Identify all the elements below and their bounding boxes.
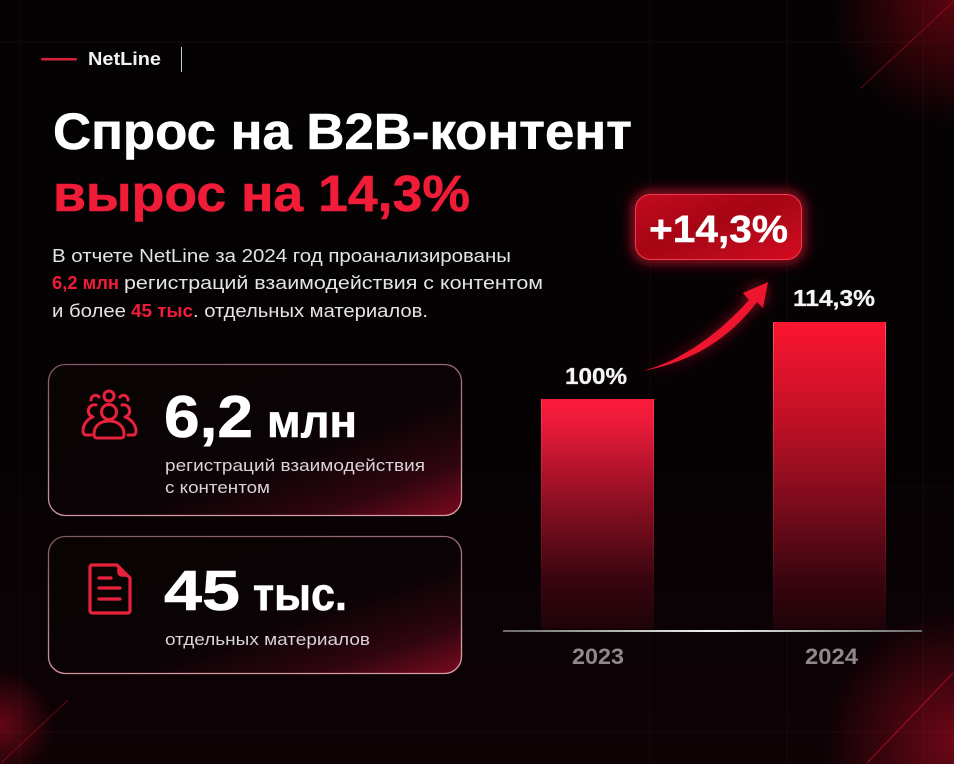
axis label: 2024: 2024 <box>805 644 859 669</box>
panel: 6,2 млн <box>48 364 462 516</box>
intro text block: В отчете NetLine за 2024 год проанализированы <box>52 246 511 266</box>
intro text block: . отдельных материалов. <box>193 301 428 321</box>
callout: +14,3% <box>633 192 804 262</box>
intro text block: регистраций взаимодействия с контентом <box>124 273 543 293</box>
bar: 2024 <box>773 322 886 629</box>
stat: 45 тыс. <box>164 559 347 623</box>
intro text block: и более <box>52 301 126 321</box>
title: вырос на 14,3% <box>53 165 470 222</box>
value label: 100%: 100% <box>565 363 627 389</box>
panel: 45 тыс. <box>48 536 462 674</box>
arrow: growth <box>643 282 768 371</box>
logo: NetLine: NetLine <box>88 49 161 69</box>
value label: 114,3%: 114,3% <box>793 285 875 311</box>
stat: 6,2 млн: 6,2 <box>164 384 253 450</box>
bar: 2023 <box>541 399 654 629</box>
callout: +14,3%: +14,3% <box>649 209 788 251</box>
stat description: регистраций взаимодействия <box>165 456 425 475</box>
stat: 6,2 млн <box>164 384 357 450</box>
title <box>53 103 632 222</box>
icon: document <box>90 565 130 613</box>
intro text block: 45 тыс <box>131 301 193 321</box>
stat description <box>165 456 425 497</box>
icon: group of people <box>83 391 136 438</box>
stat description: с контентом <box>165 478 270 497</box>
bar chart <box>503 285 922 669</box>
stat: 45 тыс.: тыс. <box>253 568 347 620</box>
intro text block: 6,2 млн <box>52 273 119 293</box>
stat description: отдельных материалов <box>165 630 370 649</box>
stat: 45 тыс.: 45 <box>164 559 240 623</box>
intro text block <box>52 246 543 321</box>
stat: 6,2 млн: млн <box>267 395 357 447</box>
axis label: 2023: 2023 <box>572 644 624 669</box>
axis line <box>503 630 922 632</box>
title: Спрос на B2B-контент <box>53 103 632 160</box>
